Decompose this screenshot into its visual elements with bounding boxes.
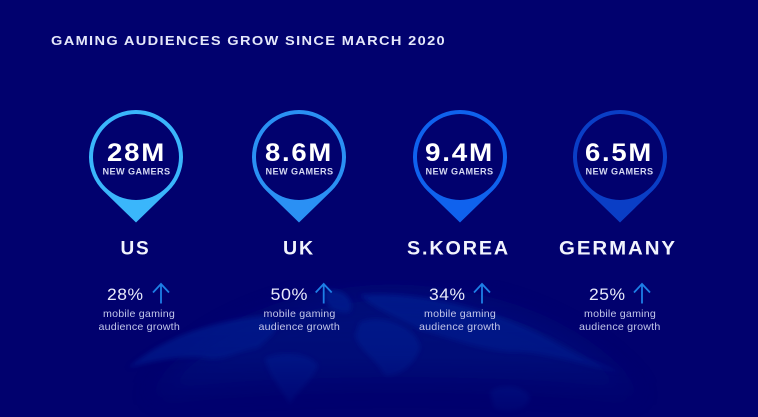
- panel: Germany: [559, 110, 677, 333]
- icon: UK up arrow: [316, 284, 332, 304]
- icon: S.Korea map pin: [413, 110, 507, 222]
- S.Korea growth percent: 34%: [429, 286, 466, 304]
- US growth caption: mobile gaming: [103, 309, 175, 320]
- panel: S.Korea: [407, 110, 510, 333]
- Germany growth caption: [579, 309, 661, 333]
- UK gamers label: NEW GAMERS: [266, 166, 334, 176]
- Germany growth caption: audience growth: [579, 322, 661, 333]
- title: GAMING AUDIENCES GROW SINCE MARCH 2020: [51, 33, 446, 48]
- panel: UK: [252, 110, 346, 333]
- UK growth caption: audience growth: [258, 322, 340, 333]
- Germany gamers label: NEW GAMERS: [586, 166, 654, 176]
- Germany gamers value: 6.5M: [585, 139, 653, 167]
- S.Korea gamers label: NEW GAMERS: [426, 166, 494, 176]
- S.Korea country name: S.KOREA: [407, 238, 510, 260]
- S.Korea growth caption: [419, 309, 501, 333]
- Germany growth caption: mobile gaming: [584, 309, 656, 320]
- icon: Germany map pin: [573, 110, 667, 222]
- icon: US up arrow: [153, 284, 169, 304]
- UK growth percent: 50%: [270, 286, 308, 304]
- Germany country name: GERMANY: [559, 238, 677, 260]
- US growth percent: 28%: [107, 286, 144, 304]
- US gamers value: 28M: [107, 139, 166, 167]
- S.Korea growth caption: audience growth: [419, 322, 501, 333]
- UK country name: UK: [283, 238, 315, 260]
- US growth caption: [98, 309, 180, 333]
- US growth caption: audience growth: [98, 322, 180, 333]
- icon: US map pin: [89, 110, 183, 222]
- Germany growth percent: 25%: [589, 286, 626, 304]
- US gamers label: NEW GAMERS: [102, 166, 170, 176]
- panel: US: [89, 110, 183, 333]
- S.Korea growth caption: mobile gaming: [424, 309, 496, 320]
- icon: Germany up arrow: [634, 284, 650, 304]
- S.Korea gamers value: 9.4M: [425, 139, 494, 167]
- globe map background: [134, 288, 610, 400]
- US country name: US: [120, 238, 150, 260]
- icon: S.Korea up arrow: [474, 284, 490, 304]
- icon: UK map pin: [252, 110, 346, 222]
- UK growth caption: mobile gaming: [264, 309, 336, 320]
- UK gamers value: 8.6M: [265, 139, 333, 167]
- UK growth caption: [258, 309, 340, 333]
